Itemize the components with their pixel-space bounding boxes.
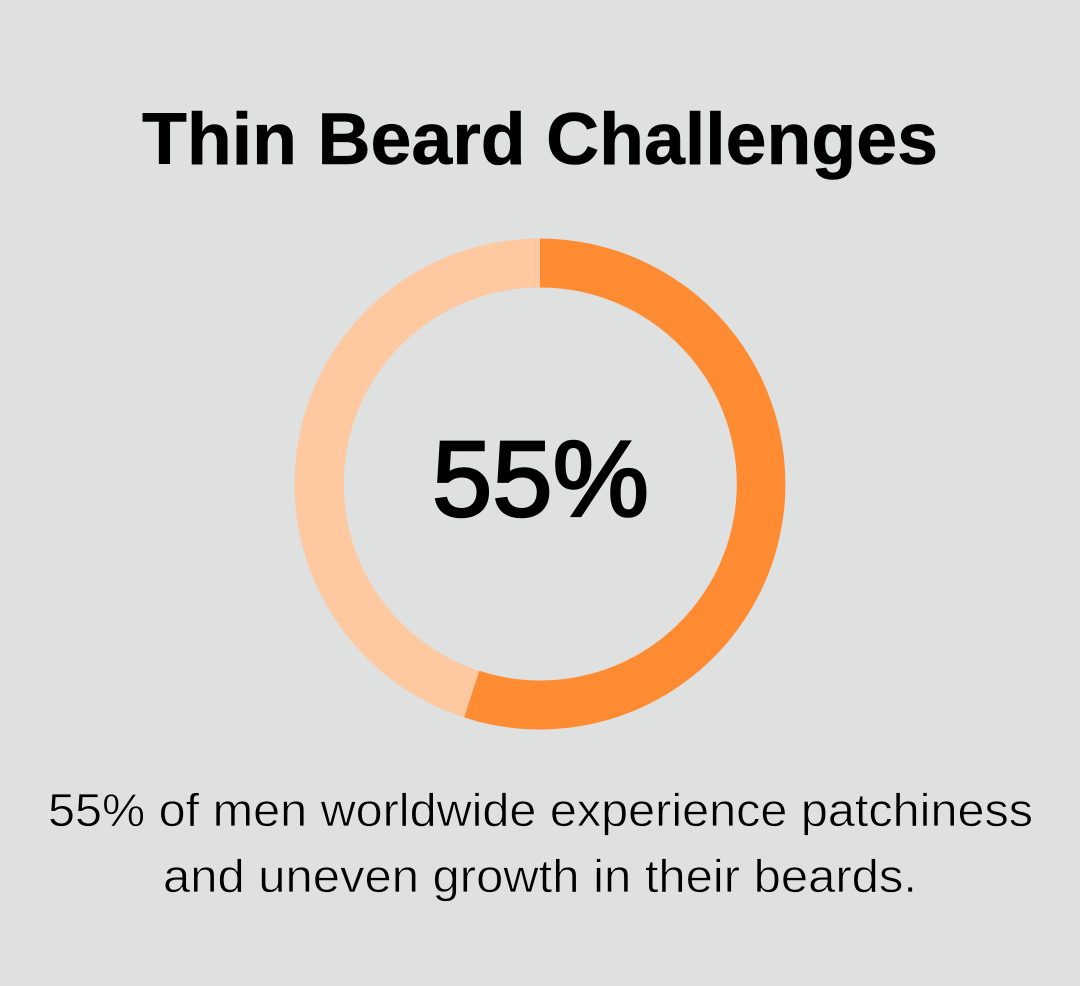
donut chart: 55 percent [294,238,785,729]
title: Thin Beard Challenges [142,99,938,180]
donut track: remaining 45 percent [294,238,540,717]
donut arc: 55 percent [464,238,785,730]
center value: 55% [432,418,649,539]
description line 1: 55% of men worldwide experience patchiness [48,784,1033,836]
description text [48,784,1033,902]
description line 2: and uneven growth in their beards. [163,850,917,902]
